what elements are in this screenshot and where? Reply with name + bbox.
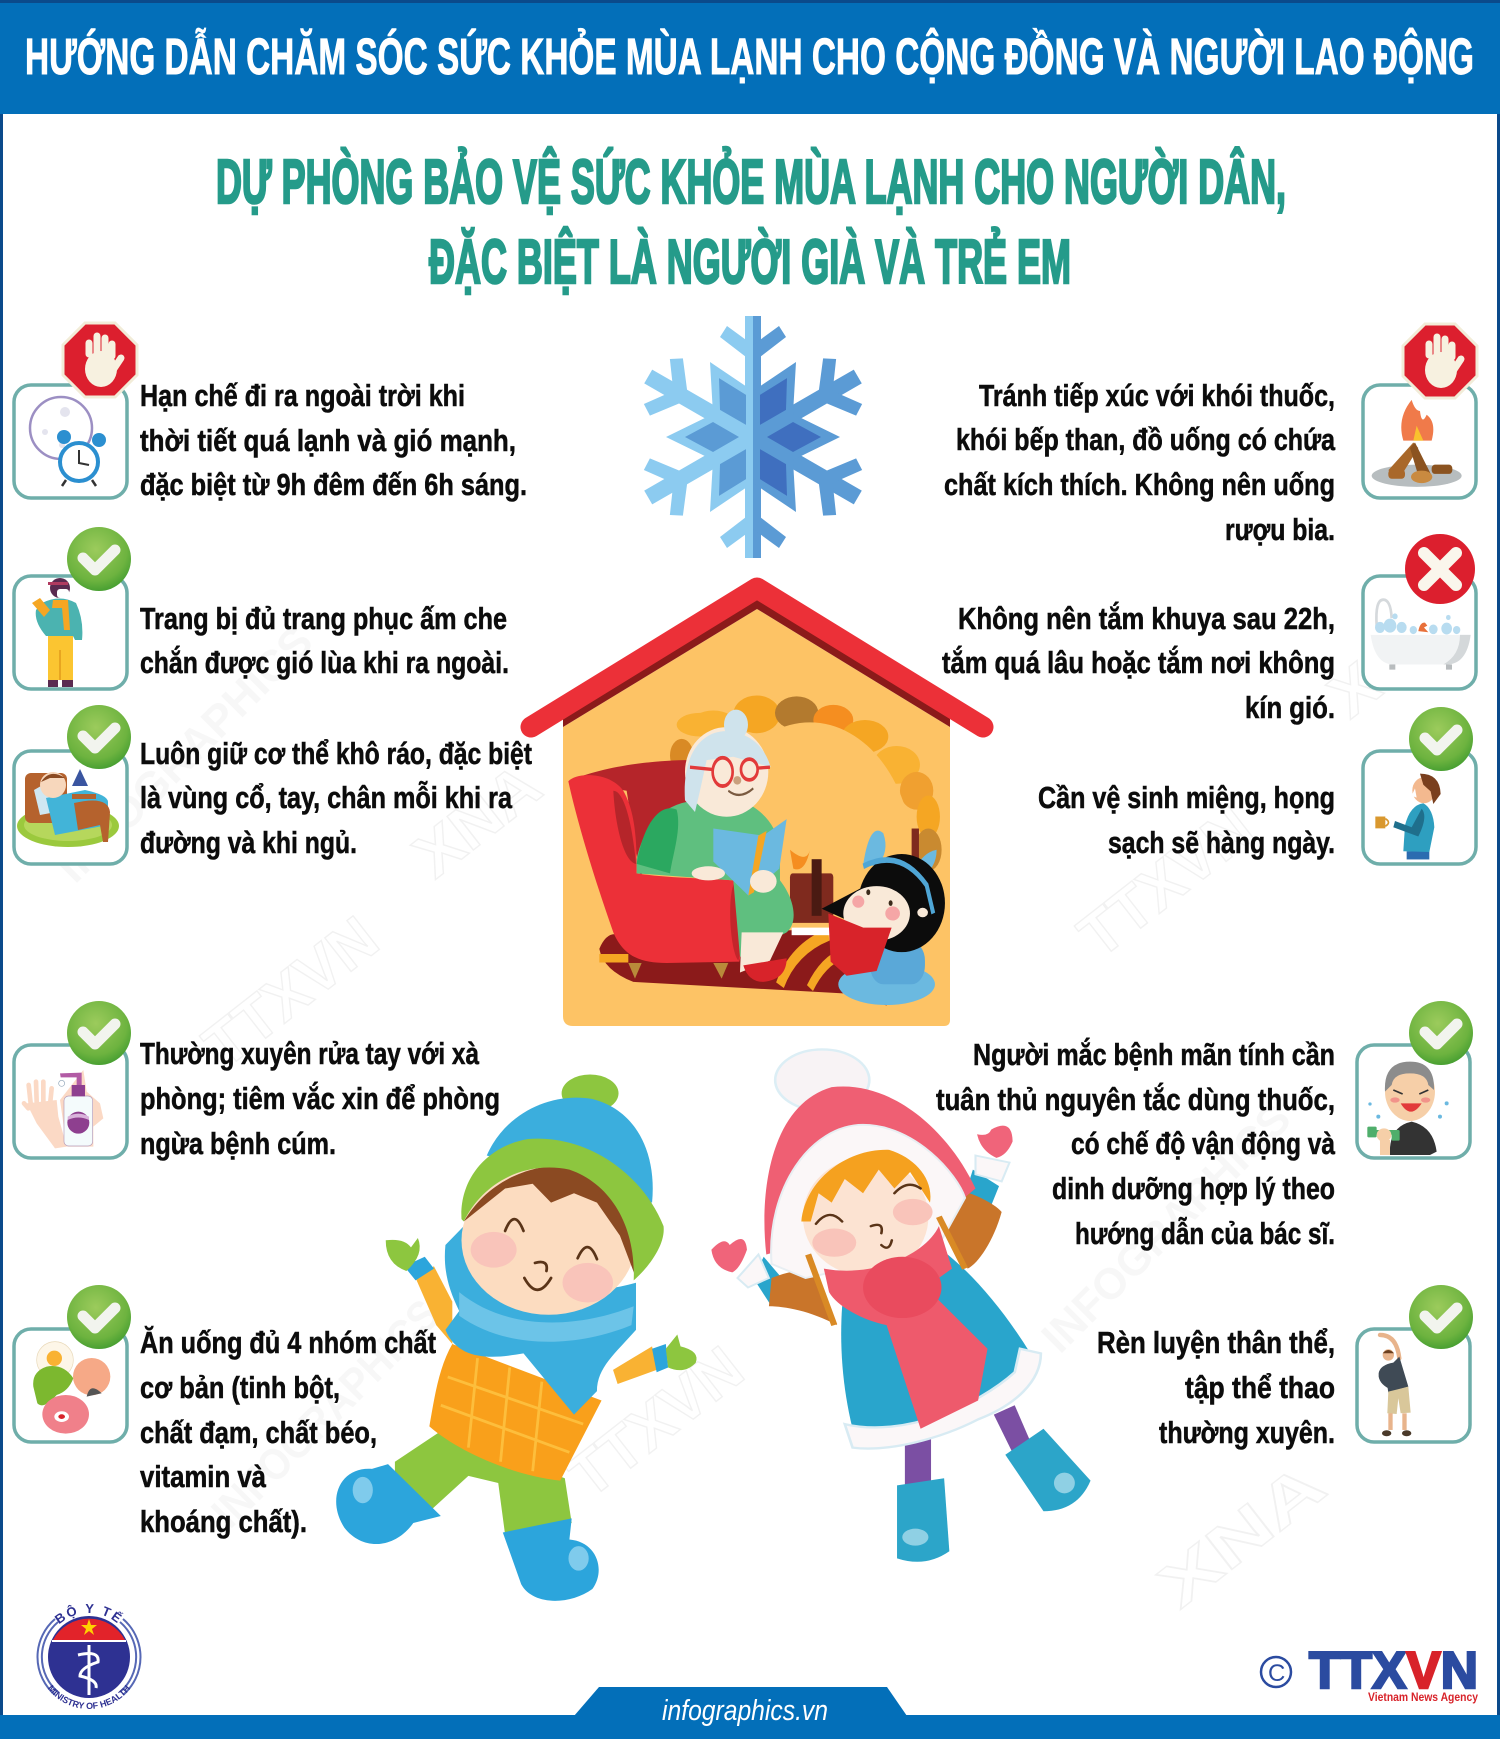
icon box: child sleeping in bed xyxy=(14,751,127,864)
subtitle xyxy=(216,148,1286,297)
illustration: boy in winter clothes xyxy=(336,1074,697,1601)
background watermarks: INFOGRAPHICS xyxy=(47,617,322,892)
icon box: person in warm clothes xyxy=(14,576,127,689)
text block: Luôn giữ cơ thể khô ráo, đặc biệt xyxy=(140,736,532,771)
check badge xyxy=(1409,707,1473,771)
girl hat and head xyxy=(764,1049,975,1325)
background watermarks: TTXVN xyxy=(556,1334,756,1511)
text block: Cần vệ sinh miệng, họng xyxy=(1038,780,1335,815)
background watermarks: TTXVN xyxy=(191,904,391,1081)
text block: vitamin và xyxy=(140,1459,267,1494)
text block xyxy=(140,378,527,502)
icon box: man stretching xyxy=(1357,1329,1470,1442)
icon box: man gargling xyxy=(1363,751,1476,864)
text block: thường xuyên. xyxy=(1159,1415,1335,1450)
text block xyxy=(1038,780,1335,860)
text block xyxy=(936,1036,1336,1251)
illustration: girl in winter clothes xyxy=(711,1049,1091,1562)
icon box: hands and soap xyxy=(14,1045,127,1158)
grandmother xyxy=(637,710,794,982)
item: nutrition xyxy=(14,1285,436,1539)
text block xyxy=(140,601,509,680)
copyright symbol: C xyxy=(1268,1660,1285,1687)
icon box: food groups xyxy=(14,1329,127,1442)
footer tab xyxy=(574,1687,907,1716)
background watermarks: INFOGRAPHICS xyxy=(1032,1094,1300,1362)
item: no late bath xyxy=(942,534,1476,725)
background watermarks: TTXVN xyxy=(1066,794,1266,971)
text block: có chế độ vận động và xyxy=(1071,1126,1336,1161)
text block: sạch sẽ hàng ngày. xyxy=(1108,825,1335,860)
text block: kín gió. xyxy=(1245,690,1335,725)
girl scarf xyxy=(824,1226,988,1429)
background watermarks: XNA xyxy=(1316,590,1469,731)
boy scarf xyxy=(445,1226,636,1415)
text block: đường và khi ngủ. xyxy=(140,825,357,860)
text block: Tránh tiếp xúc với khói thuốc, xyxy=(979,378,1335,413)
item: oral hygiene xyxy=(1038,707,1476,864)
background watermarks: XNA xyxy=(1146,1450,1338,1621)
text block xyxy=(140,1325,436,1539)
item: warm clothes xyxy=(14,527,509,689)
item: wash hands xyxy=(14,1001,500,1161)
text block: dinh dưỡng hợp lý theo xyxy=(1052,1171,1335,1206)
text block: Người mắc bệnh mãn tính cần xyxy=(973,1036,1335,1072)
text block: là vùng cổ, tay, chân mỗi khi ra xyxy=(140,780,513,815)
text block: Hạn chế đi ra ngoài trời khi xyxy=(140,378,465,413)
text block: tập thể thao xyxy=(1185,1370,1335,1405)
boy hat and head xyxy=(461,1074,664,1315)
website: infographics.vn xyxy=(662,1695,828,1727)
item: chronic patients xyxy=(936,1001,1473,1251)
copyright symbol xyxy=(1261,1657,1291,1687)
item: avoid smoke xyxy=(944,324,1477,547)
text block: Không nên tắm khuya sau 22h, xyxy=(958,600,1335,636)
check badge xyxy=(67,527,131,591)
text block: tắm quá lâu hoặc tắm nơi không xyxy=(942,644,1335,680)
text block: tuân thủ nguyên tắc dùng thuốc, xyxy=(936,1081,1335,1117)
text block: Thường xuyên rửa tay với xà xyxy=(140,1036,480,1071)
girl xyxy=(792,831,945,1005)
rug xyxy=(599,930,887,1005)
check badge xyxy=(1409,1285,1473,1349)
text block: cơ bản (tinh bột, xyxy=(140,1370,340,1405)
header band xyxy=(0,0,1500,114)
house illustration xyxy=(531,588,983,1026)
text block xyxy=(944,378,1336,547)
text block: rượu bia. xyxy=(1225,512,1335,547)
girl legs and boots xyxy=(897,1405,1091,1562)
check badge xyxy=(67,1285,131,1349)
text block: khói bếp than, đồ uống có chứa xyxy=(956,422,1336,457)
text block: Rèn luyện thân thể, xyxy=(1097,1325,1335,1360)
icon box: moon and alarm clock xyxy=(14,385,127,498)
text block: phòng; tiêm vắc xin để phòng xyxy=(140,1080,500,1116)
boy legs and boots xyxy=(336,1431,599,1601)
house body xyxy=(563,609,950,1026)
icon: snowflake xyxy=(632,316,874,558)
check badge xyxy=(67,1001,131,1065)
icon box: campfire xyxy=(1363,385,1476,498)
check badge xyxy=(67,705,131,769)
logo: Ministry of Health: MINISTRY OF HEALTH xyxy=(48,1684,130,1709)
logo: Ministry of Health xyxy=(36,1604,142,1709)
item: keep body dry xyxy=(14,705,532,864)
text block: chất kích thích. Không nên uống xyxy=(944,467,1335,502)
text block xyxy=(140,736,532,860)
girl coat xyxy=(711,1126,1041,1449)
text block xyxy=(942,600,1335,725)
footer bar xyxy=(0,1715,1500,1739)
text block: ngừa bệnh cúm. xyxy=(140,1126,336,1161)
X badge xyxy=(1405,534,1475,604)
logo: Ministry of Health: BỘ Y TẾ xyxy=(54,1604,124,1624)
text block xyxy=(140,1036,500,1161)
background watermarks: INFOGRAPHICS xyxy=(202,1290,449,1537)
grandmother and girl reading by the fireplace xyxy=(568,695,945,1005)
text block: chắn được gió lùa khi ra ngoài. xyxy=(140,644,509,680)
stop badge xyxy=(63,323,137,397)
item: limit going outside xyxy=(14,323,527,502)
check badge xyxy=(1409,1001,1473,1065)
text block: khoáng chất). xyxy=(140,1504,307,1539)
item: exercise xyxy=(1097,1285,1473,1450)
icon box: elderly man with dumbbell xyxy=(1357,1045,1470,1158)
logo: TTXVN: TTXVN xyxy=(1309,1642,1478,1700)
text block xyxy=(1097,1325,1335,1450)
stop badge xyxy=(1403,324,1477,398)
background watermarks: XNA xyxy=(401,750,554,891)
boy jacket and arms xyxy=(386,1238,697,1481)
armchair xyxy=(568,760,745,979)
footer xyxy=(0,1687,1500,1739)
background watermarks xyxy=(47,590,1469,1621)
fire xyxy=(790,850,833,923)
text block: Trang bị đủ trang phục ấm che xyxy=(140,601,507,636)
text block: chất đạm, chất béo, xyxy=(140,1415,377,1450)
text block: đặc biệt từ 9h đêm đến 6h sáng. xyxy=(140,467,527,502)
text block: Ăn uống đủ 4 nhóm chất xyxy=(140,1325,436,1360)
text block: hướng dẫn của bác sĩ. xyxy=(1075,1216,1335,1251)
text block: thời tiết quá lạnh và gió mạnh, xyxy=(140,423,516,458)
logo: TTXVN: Vietnam News Agency xyxy=(1368,1690,1478,1704)
icon box: bathtub xyxy=(1363,576,1476,689)
fireplace arch xyxy=(670,695,942,1001)
roof xyxy=(531,588,983,727)
